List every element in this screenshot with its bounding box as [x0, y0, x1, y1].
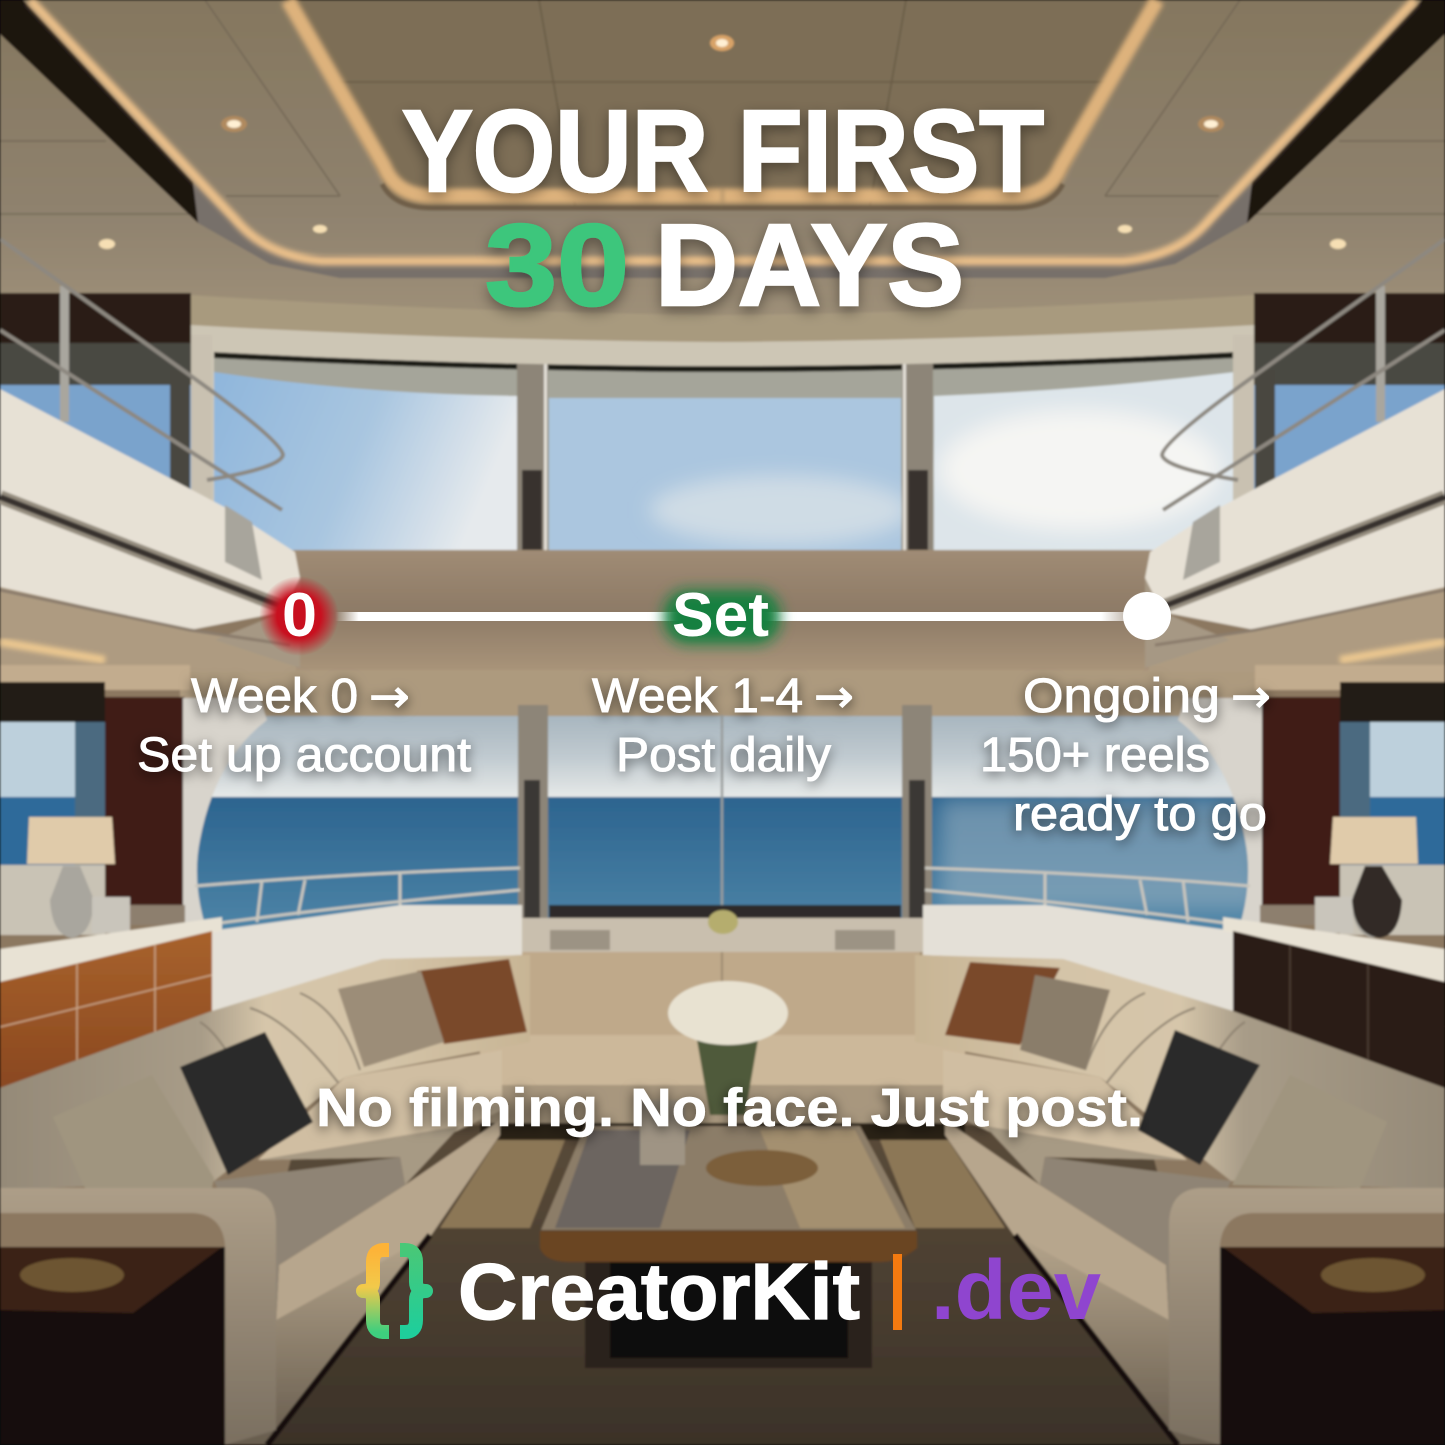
upper windows [190, 340, 1255, 555]
title [402, 86, 1044, 330]
timeline line [335, 612, 1125, 621]
title line 2: 30 [485, 200, 629, 330]
coffee table and flowers [540, 981, 917, 1368]
column: ongoing: → [1231, 669, 1271, 723]
ceiling centre panel [270, 0, 1175, 215]
tagline: No filming. No face. Just post. [316, 1078, 1143, 1138]
title line 2: DAYS [655, 200, 964, 330]
column: ongoing [980, 669, 1271, 841]
right half of room, mirrored [722, 0, 1445, 1445]
dark wall and glass [0, 293, 191, 343]
sofa seats [258, 1050, 502, 1160]
window header wall [191, 295, 722, 342]
divider [893, 1254, 902, 1330]
domain: .dev [931, 1243, 1101, 1337]
balcony [0, 389, 300, 630]
right cabinet dark [1233, 866, 1445, 1088]
cabinet [0, 917, 222, 982]
lower windows and sea [180, 670, 1265, 958]
side table [0, 1247, 225, 1445]
column: week 1-4: Post daily [616, 729, 831, 782]
right cushions [945, 962, 1387, 1188]
milestone 0 [259, 576, 339, 656]
title line 1: YOUR FIRST [402, 86, 1044, 216]
title line 2 [485, 200, 964, 330]
milestone end dot [1123, 592, 1171, 640]
middle band [280, 550, 1165, 675]
timeline [259, 576, 1171, 656]
wordmark: CreatorKit [458, 1247, 860, 1336]
lamp [27, 817, 115, 864]
milestone Set: Set [672, 581, 769, 650]
column: week 0: → [369, 669, 410, 723]
icon: curly braces [363, 1250, 426, 1332]
column: ongoing: Ongoing [1023, 670, 1220, 723]
ceiling side [0, 0, 722, 352]
column: week 0: Week 0 [191, 670, 358, 723]
column: ongoing: ready to go [1013, 788, 1267, 841]
column: ongoing: 150+ reels [980, 729, 1210, 782]
column: week 1-4: → [814, 669, 854, 723]
milestone 0: 0 [282, 581, 317, 650]
hull [195, 905, 522, 1014]
column: week 1-4 [592, 669, 854, 782]
left half of room [0, 0, 722, 1445]
column: week 1-4: Week 1-4 [592, 670, 803, 723]
side window and wood [0, 720, 75, 797]
logo [363, 1243, 1101, 1337]
sofa back [0, 955, 530, 1190]
column: week 0 [137, 669, 471, 782]
centre sofa and rug [215, 952, 1230, 1445]
left cushions [53, 959, 527, 1188]
armrest [0, 1188, 276, 1445]
column: week 0: Set up account [137, 729, 471, 782]
